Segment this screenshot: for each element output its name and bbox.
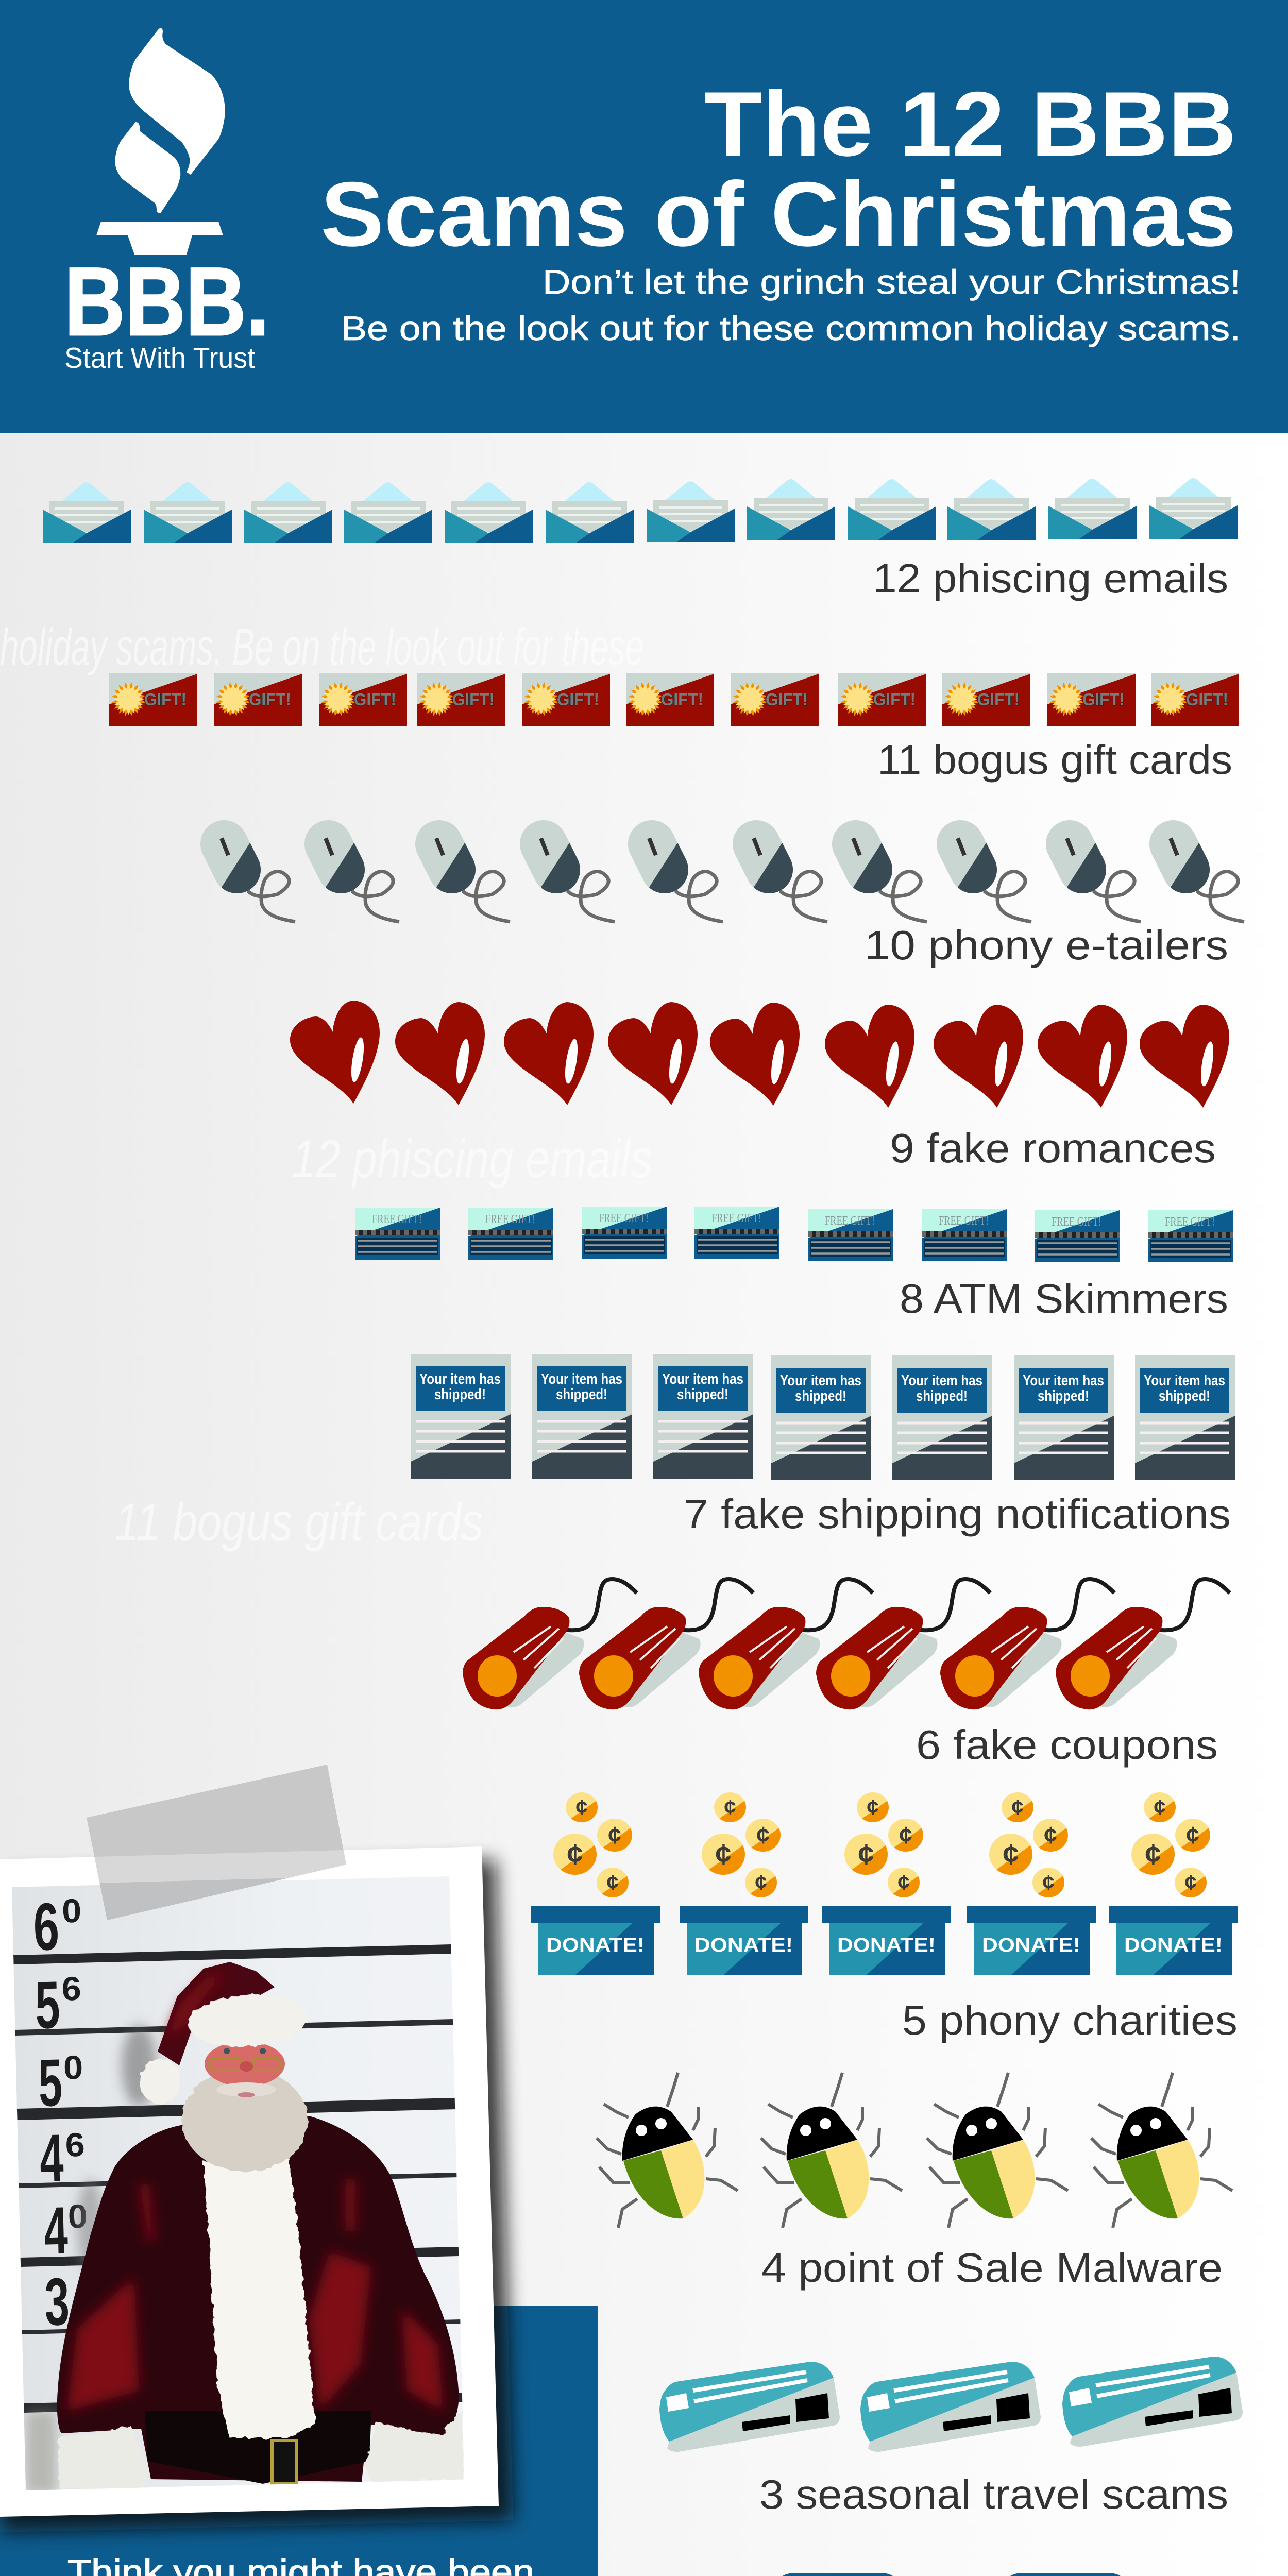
gift card 5: GIFT! <box>557 690 599 709</box>
ATM card 8 <box>1148 1210 1233 1262</box>
ATM card 2: FREE GIFT! <box>485 1213 535 1226</box>
row: 3 seasonal travel scams <box>659 2357 1243 2517</box>
speech bubble 2 <box>1003 2573 1146 2576</box>
coat <box>57 2116 459 2482</box>
row: 8 ATM skimmers <box>355 1207 1233 1321</box>
heart icons <box>290 1001 1229 1108</box>
gift card 5 <box>521 673 610 726</box>
donation box 2: ¢ <box>715 1838 732 1870</box>
label: 4 point of Sale Malware <box>761 2245 1223 2291</box>
donation box 3: ¢ <box>897 1870 910 1894</box>
ATM card 1 <box>355 1208 440 1260</box>
donation box 4: ¢ <box>1011 1795 1024 1819</box>
subtitle: Don’t let the grinch steal your Christmas! <box>543 263 1241 301</box>
hat <box>158 1962 275 2065</box>
title: The 12 BBB <box>704 73 1236 175</box>
ATM card 1: FREE GIFT! <box>372 1213 422 1226</box>
donation box 4 <box>967 1792 1096 1975</box>
shipping notice 2: Your item has <box>541 1371 622 1387</box>
photo sheet <box>0 1846 499 2517</box>
hat highlight <box>165 1971 227 2040</box>
coat highlights <box>67 2179 443 2411</box>
row: 6 fake coupons <box>463 1579 1230 1768</box>
ghost text artefacts: holiday scams. Be on the look out for these <box>0 618 644 676</box>
gift card 6: GIFT! <box>661 690 703 709</box>
height chart: 0 <box>63 2048 83 2087</box>
ATM card 3 <box>582 1207 667 1259</box>
gift card 9: GIFT! <box>977 690 1020 709</box>
gift card 2: GIFT! <box>249 690 291 709</box>
BBB logo <box>64 28 269 375</box>
gift card 4: GIFT! <box>452 690 495 709</box>
label: 3 seasonal travel scams <box>759 2471 1228 2517</box>
donation box 3: ¢ <box>867 1795 879 1819</box>
speech bubble 1 <box>775 2573 919 2576</box>
height chart: 6 <box>65 2126 85 2164</box>
gift card 3 <box>318 673 407 726</box>
donation box 5: ¢ <box>1186 1822 1199 1849</box>
gift card 7 <box>730 673 819 726</box>
label: 12 phiscing emails <box>873 555 1228 601</box>
donation box 1: ¢ <box>608 1822 621 1849</box>
icon: torch base <box>96 222 223 255</box>
header banner <box>0 0 1288 433</box>
logo tagline: Start With Trust <box>64 342 255 375</box>
height chart: 5 <box>35 1967 61 2043</box>
donation box 1 <box>531 1792 660 1975</box>
label: 8 ATM Skimmers <box>900 1276 1228 1321</box>
height chart: 3 <box>44 2264 70 2340</box>
title: Scams of Christmas <box>320 163 1236 265</box>
shipping notice 7 <box>1135 1355 1235 1480</box>
shipping notice 5: Your item has <box>901 1372 982 1389</box>
gift card 1 <box>108 673 197 726</box>
height chart: 6 <box>61 1970 81 2008</box>
gift card 8: GIFT! <box>873 690 916 709</box>
title <box>320 73 1236 265</box>
row: 11 bogus gift cards <box>108 673 1239 783</box>
donation box 5: DONATE! <box>1124 1935 1223 1956</box>
ghost text artefacts <box>0 618 652 1552</box>
shipping notice 4: Your item has <box>780 1372 861 1389</box>
shipping notice 7: Your item has <box>1144 1372 1225 1389</box>
icon: lower flame <box>115 122 180 213</box>
ghost text artefacts: 12 phiscing emails <box>292 1129 652 1189</box>
donation box 3: ¢ <box>899 1822 912 1849</box>
photo shadow <box>0 1860 513 2532</box>
ATM card 7 <box>1035 1210 1120 1262</box>
donation box 2: ¢ <box>755 1870 767 1894</box>
label: 7 fake shipping notifications <box>684 1491 1231 1537</box>
hat brim <box>187 1991 309 2050</box>
row: 7 fake shipping notifications <box>411 1354 1235 1537</box>
gift card 11: GIFT! <box>1186 690 1228 709</box>
row: 10 phony e-tailers <box>222 838 1244 968</box>
donation box 4: ¢ <box>1044 1822 1057 1849</box>
santa mugshot <box>0 1865 474 2499</box>
subtitle <box>341 263 1241 347</box>
fur placket <box>204 2158 315 2438</box>
label: 6 fake coupons <box>916 1722 1218 1768</box>
donation box 4: ¢ <box>1003 1838 1019 1870</box>
shipping notice 3 <box>653 1354 753 1479</box>
height chart: 0 <box>67 2197 88 2235</box>
donation box 3 <box>822 1792 951 1975</box>
gift card 8 <box>837 673 926 726</box>
logo wordmark: BBB. <box>64 247 269 355</box>
shipping notice 3: Your item has <box>662 1371 743 1387</box>
ATM card 3: FREE GIFT! <box>599 1212 649 1225</box>
gift card 7: GIFT! <box>766 690 808 709</box>
mouse icons <box>222 838 1244 922</box>
right cuff <box>365 2411 464 2482</box>
height chart: 5 <box>38 2045 63 2121</box>
row: 12 phishing emails <box>43 478 1238 601</box>
donation box 4: DONATE! <box>982 1935 1080 1956</box>
panel: call to action <box>0 2306 598 2576</box>
shipping notice 1: shipped! <box>434 1386 486 1403</box>
ATM card 5 <box>808 1209 893 1261</box>
hat pompom <box>140 2059 181 2104</box>
left cuff <box>58 2427 148 2488</box>
height chart: 4 <box>39 2120 64 2196</box>
santa shadow <box>26 2025 157 2494</box>
label: 11 bogus gift cards <box>877 737 1232 783</box>
donation box 3: DONATE! <box>837 1935 936 1956</box>
gift card 11 <box>1150 673 1239 726</box>
shipping notice 7: shipped! <box>1159 1388 1210 1404</box>
shipping notice 4: shipped! <box>795 1388 846 1404</box>
shipping notice 2 <box>532 1354 632 1479</box>
shipping notice 6: Your item has <box>1023 1372 1104 1389</box>
donation box 1: ¢ <box>567 1838 583 1870</box>
donation box 5 <box>1109 1792 1238 1975</box>
ticket icons <box>659 2357 1243 2452</box>
bug icons <box>597 2073 1232 2228</box>
shipping notice 3: shipped! <box>677 1386 728 1403</box>
gift card 2 <box>213 673 302 726</box>
label: 9 fake romances <box>890 1125 1216 1171</box>
ATM card 2 <box>468 1208 553 1260</box>
dynamite icons <box>463 1579 1230 1709</box>
wall <box>0 1865 474 2499</box>
moustache and mouth <box>216 2082 276 2097</box>
donation box 5: ¢ <box>1154 1795 1166 1819</box>
shipping notice 2: shipped! <box>556 1386 607 1403</box>
label: 5 phony charities <box>902 1997 1238 2043</box>
eyes and glasses <box>210 2048 281 2072</box>
icon: torch flame <box>129 28 225 175</box>
ATM card 8: FREE GIFT! <box>1165 1215 1215 1229</box>
envelope icons <box>43 478 1238 543</box>
row: 2 grandkids stranded <box>775 2573 1249 2576</box>
shipping notice 5 <box>892 1355 992 1480</box>
shipping notice 1 <box>411 1354 511 1479</box>
panel: polaroid photo <box>0 1762 499 2517</box>
donation box 1: DONATE! <box>546 1935 645 1956</box>
row: 5 phony charities <box>531 1792 1238 2043</box>
row: 9 fake romances <box>290 1001 1229 1171</box>
donation box 5: ¢ <box>1145 1838 1161 1870</box>
belt <box>145 2411 371 2484</box>
row: 4 point of sale malware <box>597 2073 1232 2291</box>
ATM card 5: FREE GIFT! <box>825 1214 875 1228</box>
belt buckle <box>272 2441 297 2484</box>
shipping notice 4 <box>771 1355 871 1480</box>
beard <box>182 2069 308 2172</box>
shipping notice 6: shipped! <box>1038 1388 1089 1404</box>
ATM card 4: FREE GIFT! <box>711 1212 761 1225</box>
height chart: 6 <box>32 1889 60 1964</box>
donation box 1: ¢ <box>575 1795 588 1819</box>
donation box 2: ¢ <box>756 1822 770 1849</box>
shipping notice 1: Your item has <box>419 1371 501 1387</box>
subtitle: Be on the look out for these common holiday scams. <box>341 309 1241 347</box>
donation box 2: ¢ <box>724 1795 736 1819</box>
gift card 10 <box>1046 673 1136 726</box>
gift card 10: GIFT! <box>1082 690 1125 709</box>
gift card 1: GIFT! <box>144 690 187 709</box>
shipping notice 6 <box>1014 1355 1114 1480</box>
height chart: 0 <box>61 1892 82 1930</box>
gift card 6 <box>625 673 714 726</box>
gift card 9 <box>941 673 1030 726</box>
tape <box>77 1762 361 1922</box>
ATM card 6: FREE GIFT! <box>939 1214 989 1228</box>
gift card 3: GIFT! <box>354 690 396 709</box>
shipping notice 5: shipped! <box>916 1388 968 1404</box>
donation box 2 <box>680 1792 808 1975</box>
ghost text artefacts: 11 bogus gift cards <box>115 1493 483 1552</box>
donation box 4: ¢ <box>1042 1870 1055 1894</box>
donation box 5: ¢ <box>1184 1870 1197 1894</box>
label: 10 phony e-tailers <box>865 922 1228 968</box>
gift card 4 <box>416 673 505 726</box>
height chart: 4 <box>43 2193 69 2268</box>
ATM card 4 <box>694 1207 779 1259</box>
ATM card 6 <box>922 1209 1007 1261</box>
height chart <box>12 1879 467 2413</box>
donation box 3: ¢ <box>858 1838 874 1870</box>
ATM card 7: FREE GIFT! <box>1052 1215 1101 1229</box>
face <box>205 2041 285 2087</box>
donation box 2: DONATE! <box>694 1935 793 1956</box>
donation box 1: ¢ <box>606 1870 619 1894</box>
